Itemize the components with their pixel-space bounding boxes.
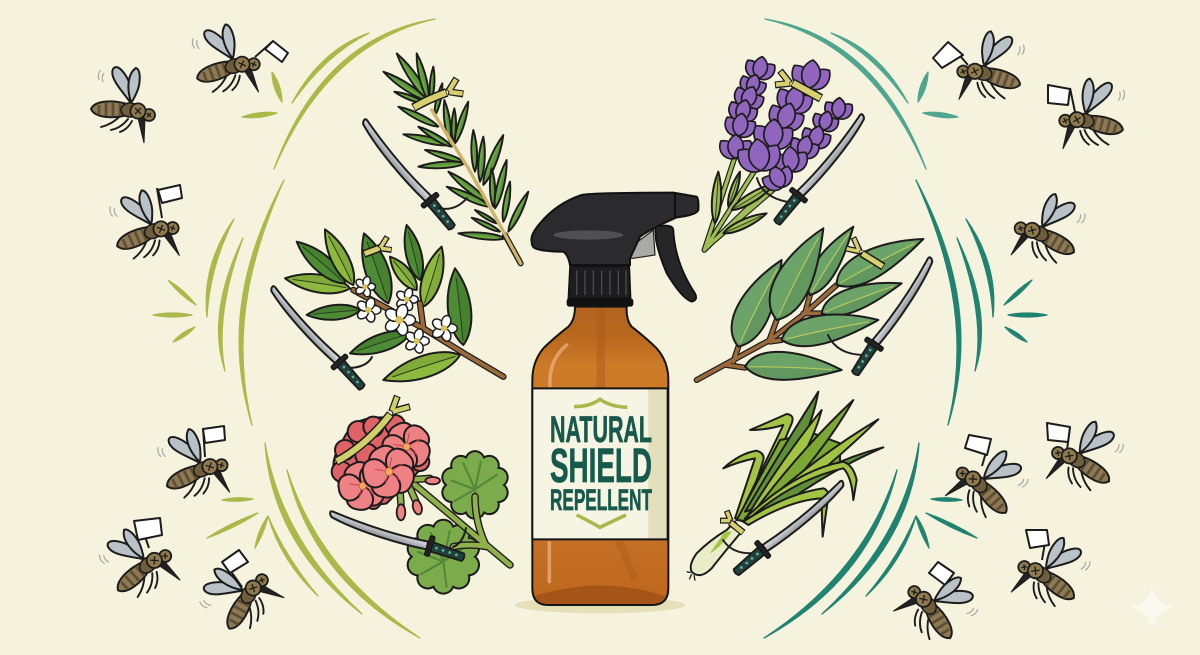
plant: rosemary sprig (381, 51, 531, 263)
katana: lemongrass (723, 474, 850, 581)
mosquito 3 with white flag (100, 182, 190, 277)
mosquito 1 (91, 67, 155, 143)
katana: lavender (757, 109, 871, 229)
plant: eucalyptus branch (697, 219, 929, 382)
spray bottle (515, 193, 698, 613)
mosquito 11 with white flag (1037, 410, 1133, 509)
geranium leaves (408, 451, 508, 594)
plant: lemongrass (687, 392, 883, 581)
glass highlights (549, 345, 567, 582)
mosquito 8 with white flag (1048, 73, 1134, 163)
lavender spike: right (768, 96, 857, 178)
mosquito 7 with white flag (933, 24, 1034, 117)
eucalyptus stem (697, 285, 837, 380)
sprayer head (531, 193, 698, 265)
label text: SHIELD (550, 439, 652, 493)
geranium tie (336, 396, 410, 462)
rosemary tie (413, 78, 463, 108)
plant: geranium (332, 396, 510, 594)
katana: geranium (327, 503, 467, 567)
geranium back petals (332, 415, 429, 509)
mosquito 2 with white flag (183, 17, 288, 110)
watermark sparkle (1130, 585, 1174, 630)
bottle shadow (515, 597, 685, 613)
geranium buds (397, 477, 440, 520)
lavender spike: small low (755, 158, 802, 200)
bottle cap (567, 266, 633, 307)
tea tree tie (364, 237, 392, 254)
tea tree flowers (354, 276, 457, 354)
mosquito 13 with white flag (887, 562, 986, 655)
label panel (532, 388, 668, 539)
force field arcs: right lower (764, 443, 977, 638)
mosquito 6 with white flag (192, 550, 289, 645)
plant: tea tree branch (284, 223, 503, 390)
bottle body (532, 307, 668, 605)
eucalyptus leaves (721, 219, 929, 382)
lavender stems and leaves (704, 157, 788, 250)
tea tree leaves (284, 223, 475, 390)
mosquito 5 with white flag (90, 516, 188, 616)
geranium stems (400, 478, 510, 565)
mosquito 9 (1001, 184, 1095, 282)
lemongrass bulb (687, 522, 742, 581)
lemongrass blades (723, 392, 883, 537)
force field arcs: left upper (242, 19, 435, 169)
geranium flowers (338, 420, 435, 513)
dip tube (597, 308, 638, 582)
katana: rosemary (356, 113, 467, 235)
mosquito 12 with white flag (1002, 526, 1100, 625)
tea tree stem (353, 290, 503, 377)
mosquito 10 with white flag (938, 435, 1037, 535)
label text: NATURAL (550, 408, 652, 450)
label text (550, 408, 652, 517)
katana: tea tree (264, 280, 372, 395)
lemongrass tie (720, 511, 743, 533)
force field arcs: left lower (207, 443, 420, 638)
lavender tie (775, 71, 821, 98)
force field arcs: right upper (765, 19, 958, 169)
force field arcs: right middle (916, 180, 1047, 425)
mosquito 4 with white flag (148, 420, 240, 516)
label text: REPELLENT (550, 484, 652, 517)
label top chevron (574, 399, 627, 407)
katana: eucalyptus (828, 252, 940, 380)
rosemary needles (381, 51, 531, 241)
eucalyptus tie (846, 237, 883, 267)
rosemary stem (432, 110, 521, 263)
force field arcs: left middle (153, 180, 284, 425)
label bottom chevron (577, 515, 626, 527)
glass base shade (535, 585, 665, 604)
trigger mechanism (628, 230, 655, 258)
plant: lavender (704, 53, 857, 250)
lavender spike: centre (730, 57, 837, 180)
trigger lever (655, 226, 696, 302)
lavender spike: left (715, 53, 781, 163)
